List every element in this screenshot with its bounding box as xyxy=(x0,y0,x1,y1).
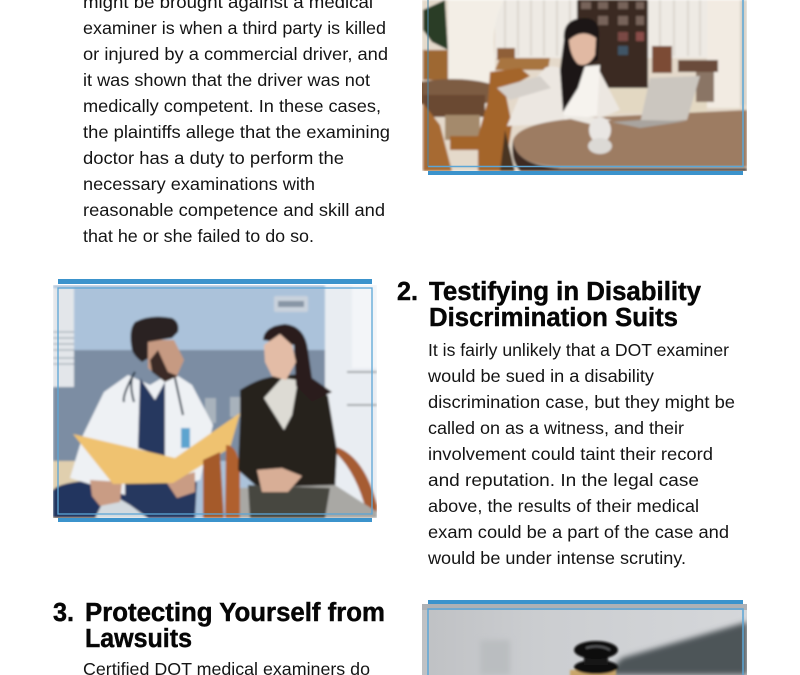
text block: section 2 body: above, the results of their medical xyxy=(428,496,699,516)
text block: section 2 body xyxy=(427,340,735,568)
number: 3.: 3. xyxy=(53,599,74,627)
text block: section 2 body: called on as a witness, and their xyxy=(428,418,684,438)
photo: doctor and patient reviewing a folder xyxy=(53,279,377,522)
photo: gavel xyxy=(422,600,747,675)
heading: Testifying in Disability Discrimination Suits: Discrimination Suits xyxy=(429,304,678,332)
text block: section 1 continuation: the plaintiffs allege that the examining xyxy=(83,122,390,142)
text block: section 2 body: exam could be a part of the case and xyxy=(428,522,729,542)
text block: section 1 continuation: doctor has a duty to perform the xyxy=(83,148,344,168)
heading: Testifying in Disability Discrimination Suits xyxy=(429,278,702,332)
text block: section 2 body: discrimination case, but they might be xyxy=(428,392,735,412)
photo: woman reviewing papers at a table xyxy=(402,0,747,175)
text block: section 1 continuation: examiner is when a third party is killed xyxy=(83,18,386,38)
heading: Protecting Yourself from Lawsuits xyxy=(85,599,385,653)
text block: section 1 continuation xyxy=(83,0,390,246)
text block: section 2 body: and reputation. In the legal case xyxy=(428,470,699,490)
heading: Protecting Yourself from Lawsuits: Lawsuits xyxy=(85,625,192,653)
heading: Protecting Yourself from Lawsuits: Protecting Yourself from xyxy=(85,599,385,627)
text block: section 2 body: involvement could taint their record xyxy=(428,444,713,464)
text block: section 1 continuation: necessary examinations with xyxy=(83,174,315,194)
number: 2.: 2. xyxy=(397,278,418,306)
text block: section 1 continuation: medically competent. In these cases, xyxy=(83,96,381,116)
text block: section 1 continuation: that he or she failed to do so. xyxy=(83,226,314,246)
heading: Testifying in Disability Discrimination Suits: Testifying in Disability xyxy=(429,278,702,306)
text block: section 1 continuation: it was shown that the driver was not xyxy=(83,70,370,90)
text block: section 2 body: would be under intense scrutiny. xyxy=(427,548,686,568)
text block: section 2 body: It is fairly unlikely that a DOT examiner xyxy=(428,340,729,360)
text block: section 1 continuation: or injured by a commercial driver, and xyxy=(83,44,388,64)
text block: section 1 continuation: reasonable competence and skill and xyxy=(83,200,385,220)
text block: section 2 body: would be sued in a disability xyxy=(427,366,654,386)
